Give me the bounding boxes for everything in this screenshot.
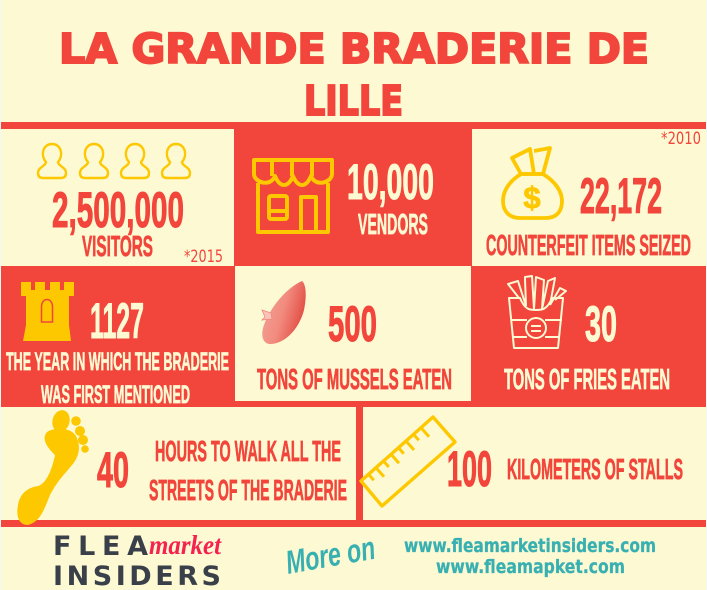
- icon: four people: [38, 144, 190, 178]
- panel: mussels: [235, 266, 471, 401]
- panel: walking hours: [17, 408, 347, 525]
- panel: visitors: [1, 129, 234, 267]
- website links: [404, 535, 656, 578]
- footnote: 2015: *2015: [184, 247, 223, 267]
- more on: More on: [283, 529, 378, 581]
- icon: fries box: [508, 276, 566, 348]
- label: year mentioned: THE YEAR IN WHICH THE BRADERIE: [6, 348, 229, 376]
- label: mussels: TONS OF MUSSELS EATEN: [257, 364, 452, 396]
- number: visitors: 2,500,000: [52, 182, 184, 238]
- icon: money bag: [503, 148, 562, 218]
- number: vendors: 10,000: [347, 154, 434, 210]
- title: LA GRANDE BRADERIE DE: [59, 25, 649, 73]
- number: 100: 100: [447, 441, 492, 497]
- number: 30: 30: [585, 296, 617, 352]
- icon: storefront: [254, 160, 332, 232]
- website links: www.fleamarketinsiders.com: [404, 535, 656, 557]
- panel: first mentioned: 1127: [90, 293, 144, 349]
- title: LILLE: [304, 77, 403, 125]
- title: [59, 25, 649, 125]
- website links: www.fleamapket.com: [436, 556, 625, 578]
- number: 40: 40: [97, 442, 129, 498]
- label: visitors: VISITORS: [82, 231, 153, 263]
- label: walking hours: HOURS TO WALK ALL THE: [155, 436, 341, 468]
- logo: flea market insiders: [53, 530, 222, 590]
- logo: flea market insiders: FLEA: [53, 531, 148, 562]
- logo: flea market insiders: market: [149, 530, 222, 560]
- icon: mussel: [262, 281, 306, 344]
- icon: ruler: [361, 417, 455, 506]
- panel: vendors: VENDORS: [358, 209, 428, 241]
- panel: counterfeit items: [472, 129, 706, 266]
- label: year mentioned: WAS FIRST MENTIONED: [41, 381, 190, 409]
- infographic: STREETS OF THE BRADERIE: [149, 475, 347, 507]
- panel: vendors: [234, 129, 472, 266]
- label: year mentioned: [6, 348, 229, 409]
- icon: castle tower: [21, 282, 74, 341]
- panel: first mentioned: [1, 266, 235, 409]
- label: walking hours: [149, 436, 347, 507]
- number: 500: 500: [328, 296, 377, 352]
- icon: footprint: [17, 408, 89, 525]
- panel: fries: [471, 266, 706, 407]
- icon: money bag: $: [523, 180, 541, 215]
- panel: kilometers of stalls: [361, 417, 683, 506]
